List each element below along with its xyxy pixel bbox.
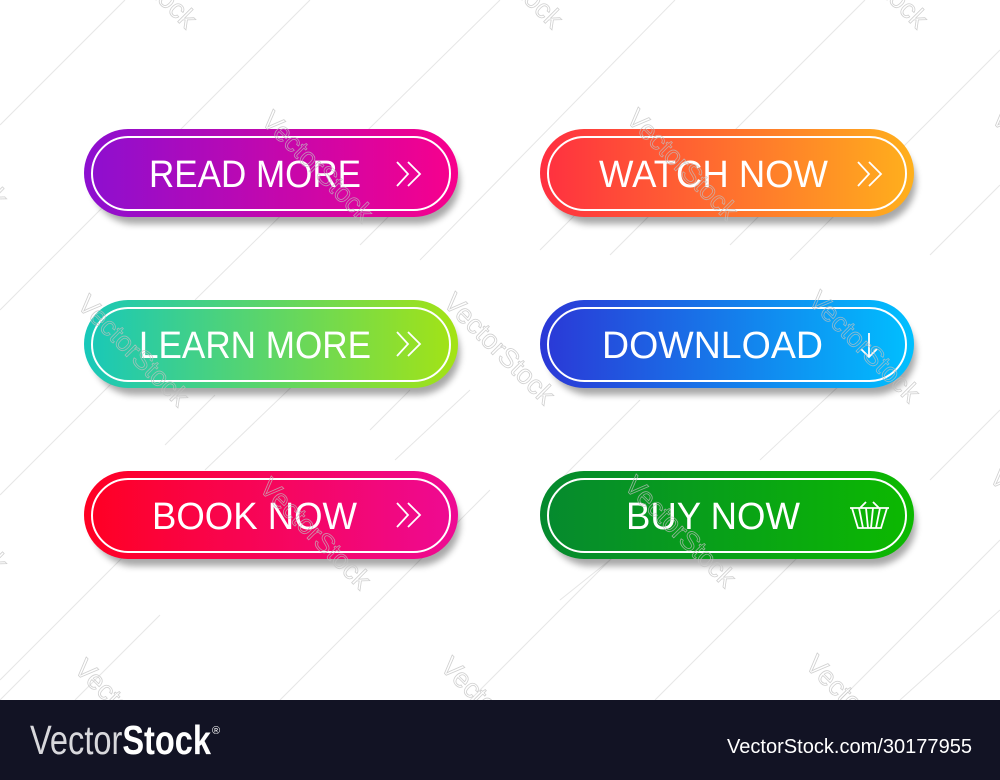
watermarks: VectorStock	[800, 649, 923, 772]
watermarks: VectorStock	[803, 285, 926, 408]
icon: down arrow	[861, 333, 877, 357]
label: watch now: WATCH NOW	[599, 154, 828, 196]
watermarks: VectorStock	[619, 470, 742, 593]
label: read more: READ MORE	[149, 154, 361, 196]
icon: double chevron	[397, 503, 420, 527]
watermarks: VectorStock	[254, 472, 377, 595]
button: watch now	[540, 129, 916, 224]
icon: double chevron	[858, 162, 881, 186]
button: learn more	[84, 300, 460, 395]
logo registered mark: ®	[212, 725, 220, 737]
watermarks: VectorStock	[72, 289, 195, 412]
footer band	[0, 700, 1000, 780]
icon: double chevron	[397, 162, 420, 186]
label: download: DOWNLOAD	[602, 325, 823, 367]
icon: shopping basket	[850, 502, 889, 528]
label: learn more: LEARN MORE	[139, 325, 371, 367]
button: download	[540, 300, 916, 395]
watermarks: VectorStock	[256, 105, 379, 228]
button: book now	[84, 471, 460, 566]
label: book now: BOOK NOW	[152, 496, 357, 538]
watermarks: VectorStock	[438, 287, 561, 410]
icon: double chevron	[397, 332, 420, 356]
label: buy now: BUY NOW	[626, 496, 800, 538]
button: read more	[84, 129, 460, 224]
logo: VectorStock: VectorStock	[30, 717, 211, 763]
watermarks: VectorStock	[621, 103, 744, 226]
watermarks: VectorStock	[435, 651, 558, 774]
image id: VectorStock.com/30177955	[727, 736, 972, 758]
watermarks: VectorStock	[69, 653, 192, 776]
button: buy now	[540, 471, 916, 566]
